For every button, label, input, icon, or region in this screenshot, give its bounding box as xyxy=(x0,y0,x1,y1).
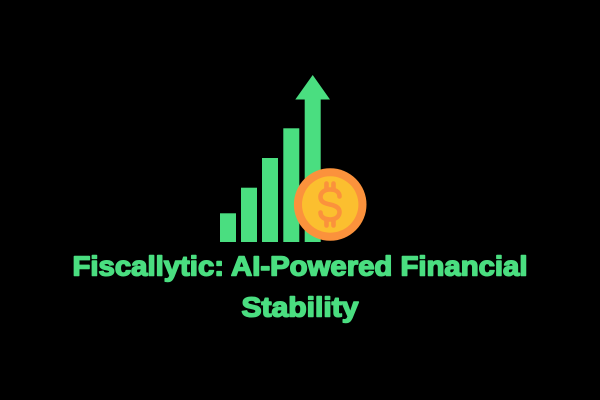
icon: dollar coin xyxy=(294,168,367,241)
title line 1: Fiscallytic: AI-Powered Financial xyxy=(72,251,528,282)
dollar sign xyxy=(320,184,340,226)
title line 2: Stability xyxy=(242,292,359,323)
bar 2 xyxy=(241,188,257,242)
coin face xyxy=(302,176,358,233)
bar 3 xyxy=(262,158,278,242)
bar 4 xyxy=(283,128,299,242)
coin rim xyxy=(294,168,367,241)
icon: growth bar chart with arrow xyxy=(220,75,330,242)
title xyxy=(72,251,528,323)
bar 1 xyxy=(220,213,236,242)
rising arrow xyxy=(295,75,330,242)
